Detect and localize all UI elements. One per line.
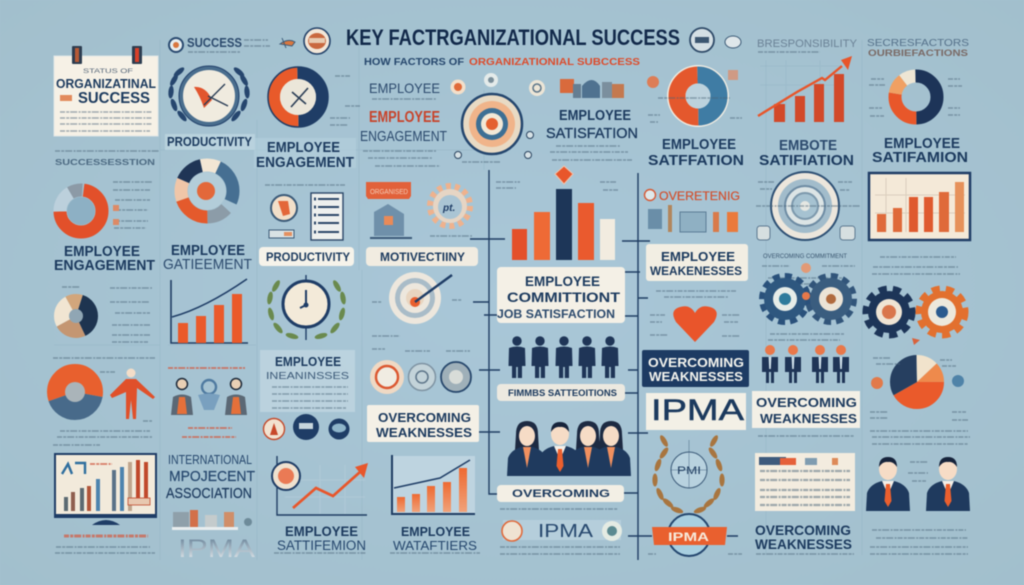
header: success factors	[867, 37, 969, 58]
label: overcoming weaknesses 2: WEAKNESSES	[755, 537, 852, 552]
card: IPMA: IPMA	[651, 394, 744, 427]
chart: pie	[870, 358, 968, 420]
chart: rising bars with arrow	[758, 56, 852, 122]
box: overcoming weaknesses dark: OVERCOMING	[648, 355, 744, 370]
pill: productivity	[259, 247, 354, 266]
header: success strip: SUCCESS	[187, 36, 242, 50]
card: overcoming weaknesses left: OVERCOMING	[378, 410, 471, 425]
text block: below pie	[870, 431, 970, 444]
icon: peach gear	[430, 186, 472, 236]
card: employee weakeneses	[646, 244, 748, 281]
pill: overcoming	[497, 485, 624, 502]
icons: three round badges	[264, 414, 350, 440]
label: employee satifemion	[274, 524, 366, 553]
header: reliability strip: BRESPONSIBILITY	[757, 38, 858, 50]
chart: pie with figure	[53, 368, 155, 445]
chart: six segment ring	[181, 165, 233, 217]
text block: international project association: INTERNATIONAL	[168, 452, 252, 467]
pill: motivectiiny: MOTIVECTIINY	[380, 250, 465, 264]
label: employee satisfation	[546, 108, 638, 160]
title: KEY FACTRGANIZATIONAL SUCCESS	[346, 25, 680, 50]
label: employee engagement: EMPLOYEE	[267, 140, 340, 156]
text block: international project association: MPOJECENT	[169, 468, 255, 485]
label: employee satifation 2	[648, 136, 744, 169]
icons: ribbon and building: ORGANISED	[370, 187, 408, 196]
label: embote satifiation	[759, 138, 854, 169]
text strip: success band	[55, 151, 160, 167]
chart: framed bars	[869, 173, 970, 240]
box: overcoming weaknesses dark	[642, 350, 749, 387]
pill: satisfactions: FIMMBS SATTEOITIONS	[508, 388, 617, 399]
small badges	[450, 73, 498, 94]
text strip: row 3	[53, 357, 155, 359]
text block: below monitor	[55, 536, 155, 553]
text strip: success band: SUCCESSESSTION	[55, 158, 155, 167]
icons: team busts	[507, 421, 631, 476]
icon: engagement donut	[268, 67, 360, 127]
icons: ribbon and building	[366, 182, 412, 238]
chart: small pie	[62, 287, 152, 342]
icons: two gears	[762, 276, 854, 340]
text line	[758, 435, 854, 437]
label: employee satifation 2: SATFFATION	[648, 152, 744, 169]
logo text: IPMA silver: IPMA	[178, 535, 255, 563]
text block: bottom right	[870, 530, 968, 554]
label: overetenig: OVERETENIG	[659, 189, 740, 203]
label: overcoming weaknesses 2: OVERCOMING	[755, 523, 851, 538]
text block: international project association	[166, 452, 255, 502]
badge: IPMA ribbon: IPMA	[668, 532, 709, 544]
header: success strip	[169, 36, 295, 52]
label: employee gatieement: GATIEEMENT	[163, 257, 252, 273]
panel: employee weaknesses: INEANINSSES	[266, 370, 349, 382]
label: employee satifamion: EMPLOYEE	[884, 135, 960, 152]
card heading: ORGANIZATINAL	[56, 77, 156, 91]
panel: employee weaknesses: EMPLOYEE	[275, 355, 341, 369]
icons: four staff	[762, 345, 849, 383]
connector: right trunk	[622, 173, 650, 560]
icon: PMI laurel	[652, 434, 725, 515]
label: employee watafters: EMPLOYEE	[401, 524, 470, 539]
label: employee gatieement	[163, 243, 252, 273]
card: employee weakeneses: WEAKENESSES	[650, 264, 742, 278]
icon: orange diamond	[555, 166, 573, 184]
icon: commitment target	[454, 94, 534, 162]
subtitle: HOW FACTORS OF	[364, 56, 465, 68]
text block: employee engagement stack	[360, 80, 447, 166]
icons: five people	[508, 336, 618, 378]
label: embote satifiation: SATIFIATION	[759, 152, 854, 169]
icon: heart	[650, 291, 740, 342]
label: employee watafters: WATAFTIERS	[393, 538, 477, 553]
card heading 2: SUCCESS	[78, 90, 150, 107]
label: employee engagement 2	[54, 244, 155, 274]
title badges	[304, 28, 714, 54]
text block: under dial: OVERCOMING COMMITMENT	[763, 253, 847, 260]
header: reliability strip	[725, 36, 858, 52]
subtitle: ORGANIZATIONIAL SUBCCESS	[469, 56, 640, 68]
text block: employee engagement stack: EMPLOYEE	[369, 109, 440, 126]
card: employee weakeneses: EMPLOYEE	[661, 249, 735, 264]
label: employee satifation 2: EMPLOYEE	[662, 136, 736, 153]
icon: clock with green wreath	[266, 275, 347, 340]
icons: large gears	[866, 289, 965, 345]
card: employee committiont: COMMITTIONT	[507, 289, 621, 305]
card: employee committiont: JOB SATISFACTION	[497, 309, 615, 321]
label: employee satisfation: EMPLOYEE	[559, 108, 631, 124]
label: employee satifamion: SATIFAMION	[872, 149, 968, 166]
label: employee satifamion	[872, 135, 968, 166]
pill: productivity: PRODUCTIVITY	[266, 250, 350, 264]
text block: below framed chart	[872, 257, 960, 274]
icon: clock with wreath	[168, 66, 250, 126]
label: employee engagement 2: EMPLOYEE	[64, 244, 140, 260]
pill: satisfactions	[497, 384, 625, 401]
header: success factors: OURBIEFACTIONS	[868, 48, 968, 58]
text block: international project association: ASSOCIATION	[166, 485, 252, 502]
card: employee committiont: EMPLOYEE	[525, 273, 600, 289]
card: overcoming weaknesses left	[367, 405, 479, 442]
box: overcoming weaknesses dark: WEAKNESSES	[649, 369, 743, 384]
card: overcoming weaknesses	[752, 391, 860, 428]
panel: blurred table	[755, 453, 855, 511]
card: IPMA	[646, 393, 746, 430]
column separators	[54, 40, 862, 560]
icons: checklist panel	[265, 185, 345, 240]
strip: IPMA row: IPMA	[538, 521, 593, 541]
chart: monitor bars	[54, 454, 157, 525]
label: employee satisfation: SATISFATION	[546, 125, 638, 142]
text block: under dial	[762, 253, 855, 284]
icons: three circular stamps	[370, 360, 471, 394]
icon: concentric dial	[756, 172, 860, 240]
card: overcoming weaknesses: WEAKNESSES	[760, 411, 857, 426]
label: productivity: PRODUCTIVITY	[167, 134, 252, 149]
chart: bars with trend	[391, 455, 475, 514]
badge: IPMA ribbon	[640, 514, 742, 556]
icon: peach gear: pt.	[442, 203, 455, 214]
label: employee satifemion: SATTIFEMION	[277, 538, 366, 553]
label: employee engagement	[254, 138, 356, 171]
label: employee engagement: ENGAGEMENT	[256, 155, 354, 171]
icons: tiny scene	[172, 510, 252, 530]
connector: left trunk	[470, 170, 505, 494]
label: employee satifemion: EMPLOYEE	[285, 524, 358, 539]
label: employee gatieement: EMPLOYEE	[171, 243, 245, 259]
chart: rising line with badge	[272, 456, 368, 515]
icons: satisfaction header	[529, 79, 624, 98]
card: employee committiont	[497, 267, 625, 323]
icon: PMI laurel: PMI	[677, 465, 701, 477]
card: overcoming weaknesses left: WEAKNESSES	[376, 425, 472, 440]
text block: employee engagement stack: EMPLOYEE	[369, 80, 440, 96]
panel: organizational success card	[54, 46, 158, 136]
icons: two men	[866, 457, 970, 511]
panel: employee weaknesses	[260, 350, 355, 412]
icon: target with dart	[372, 272, 470, 351]
card eyebrow: STATUS OF	[83, 68, 133, 75]
chart: line and bars	[171, 279, 248, 343]
icon: ring donut	[647, 65, 742, 127]
chart: engagement donut	[60, 182, 152, 232]
pill: overcoming: OVERCOMING	[512, 488, 610, 500]
strip: IPMA row	[500, 509, 622, 554]
chart: central bars	[512, 189, 615, 260]
pill: motivectiiny	[366, 247, 478, 266]
label: employee watafters	[390, 524, 480, 553]
header: success factors: SECRESFACTORS	[867, 37, 969, 49]
label: embote satifiation: EMBOTE	[779, 138, 837, 154]
icons: office strip	[648, 205, 738, 232]
text block: employee engagement stack: ENGAGEMENT	[360, 129, 447, 145]
text labels: around central bars	[496, 182, 618, 190]
icons: three people	[168, 368, 247, 437]
subtitle	[364, 56, 640, 68]
label: employee engagement 2: ENGAGEMENT	[54, 258, 155, 274]
label: overcoming weaknesses 2	[755, 523, 854, 554]
chart: factors donut	[869, 76, 962, 118]
card: overcoming weaknesses: OVERCOMING	[756, 395, 857, 410]
